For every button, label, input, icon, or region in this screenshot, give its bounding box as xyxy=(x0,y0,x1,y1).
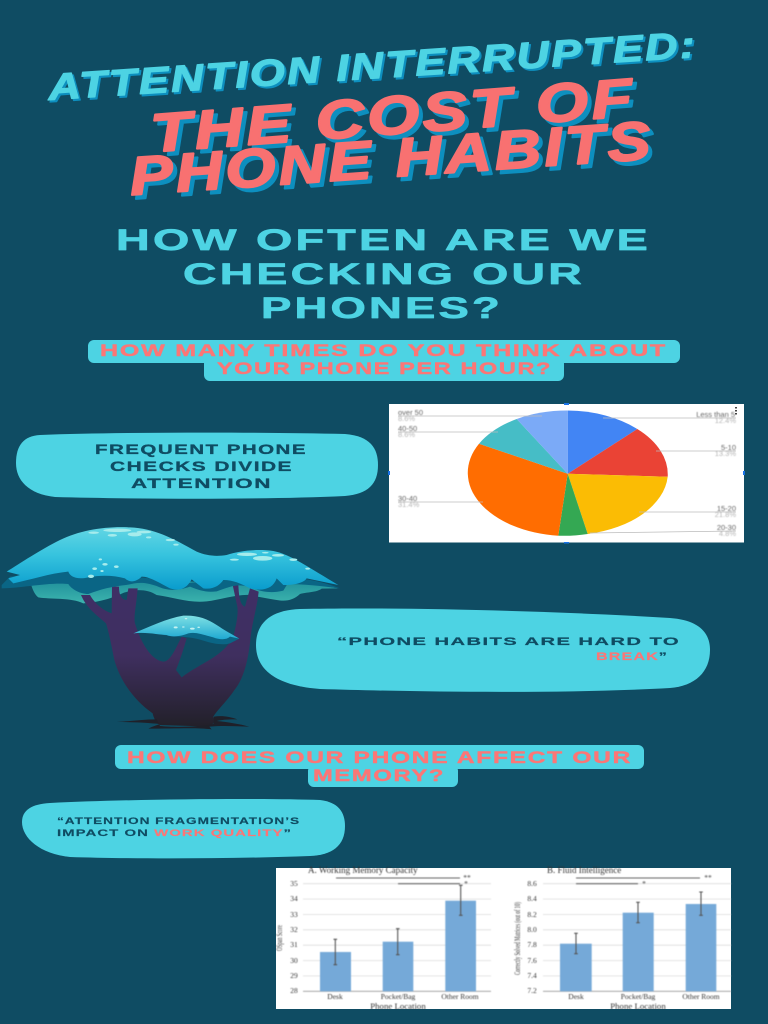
icon: mushroom tree illustration xyxy=(2,527,340,729)
chart B: fluid intelligence: 7.8 xyxy=(527,940,537,949)
chart B: fluid intelligence: Pocket/Bag xyxy=(621,992,656,1001)
chart A: working memory capacity: * xyxy=(464,879,468,888)
pie labels: 5-10 xyxy=(721,443,736,452)
chart A: working memory capacity: Phone Location xyxy=(370,1001,426,1011)
pie labels: 4.8% xyxy=(719,529,736,538)
quote bubble: phone habits are hard to break xyxy=(256,608,710,692)
chart B: fluid intelligence: * xyxy=(642,879,646,888)
pie slices xyxy=(468,410,668,536)
chart B: fluid intelligence: 7.6 xyxy=(527,956,537,965)
pie labels: 12.4% xyxy=(715,416,736,425)
pill heading: how many times: HOW MANY TIMES DO YOU THINK ABOUT xyxy=(100,342,667,360)
pie labels: Less than 5 xyxy=(696,410,735,419)
pill heading: how does our phone affect memory: HOW DOES OUR PHONE AFFECT OUR xyxy=(127,749,632,767)
tree trunk xyxy=(81,585,259,727)
chart B: fluid intelligence: Phone Location xyxy=(610,1001,666,1011)
chart A: working memory capacity: 34 xyxy=(290,894,298,903)
pie labels: 31.4% xyxy=(398,500,420,509)
chart B: fluid intelligence: 7.4 xyxy=(527,971,537,980)
pie labels: 30-40 xyxy=(398,494,417,503)
chart B: fluid intelligence xyxy=(512,865,731,1011)
chart B: fluid intelligence: 8.4 xyxy=(527,894,537,903)
heading: how often are we checking our phones: CHECKING OUR xyxy=(183,258,585,291)
callout: frequent phone checks: CHECKS DIVIDE xyxy=(110,458,293,474)
small cap spots xyxy=(174,618,200,630)
quote bubble: attention fragmentation: “ATTENTION FRAGMENTATION’S xyxy=(57,816,300,827)
pill heading: how does our phone affect memory xyxy=(115,745,644,787)
pie labels xyxy=(398,408,736,538)
chart B: fluid intelligence: 7.2 xyxy=(527,986,537,995)
quote bubble: phone habits are hard to break: BREAK ” xyxy=(596,651,668,663)
chart A: working memory capacity: OSpan Score xyxy=(275,925,284,951)
small mushroom cap xyxy=(133,616,239,639)
pie labels: 20-30 xyxy=(717,523,736,532)
chart A: working memory capacity: 33 xyxy=(290,910,298,919)
title line: attention interrupted: ATTENTION INTERRUPTED: xyxy=(46,24,698,108)
chart B: fluid intelligence: Desk xyxy=(568,992,584,1001)
title line: the cost of: THE COST OF xyxy=(148,68,638,164)
quote bubble: attention fragmentation xyxy=(22,799,345,858)
pie labels: 15-20 xyxy=(717,504,736,513)
tree main cap xyxy=(7,527,338,590)
chart A: working memory capacity: 35 xyxy=(290,879,298,888)
chart A: working memory capacity: Desk xyxy=(327,992,343,1001)
tree shadow cap xyxy=(2,572,340,594)
chart A: working memory capacity: 32 xyxy=(290,925,298,934)
chart B: fluid intelligence: Other Room xyxy=(682,992,720,1001)
chart A: working memory capacity: Other Room xyxy=(441,992,479,1001)
chart A: working memory capacity: 28 xyxy=(290,986,298,995)
chart menu dots xyxy=(735,407,737,414)
pill heading: how many times xyxy=(88,340,680,381)
heading: how often are we checking our phones: HOW OFTEN ARE WE xyxy=(116,224,651,257)
chart B: fluid intelligence: Correctly Solved Matrices (out of 10) xyxy=(512,902,522,975)
chart B: fluid intelligence: B. Fluid Intelligence xyxy=(547,865,621,875)
small cap shadow xyxy=(147,630,239,644)
pie chart panel xyxy=(388,403,745,544)
pie labels: 21.8% xyxy=(715,510,736,519)
pie labels: over 50 xyxy=(398,408,423,417)
pie leader lines xyxy=(398,416,736,533)
chart A: working memory capacity: 29 xyxy=(290,971,298,980)
chart A: working memory capacity: A. Working Memory Capacity xyxy=(308,865,418,875)
tree roots xyxy=(117,716,249,729)
chart A: working memory capacity: Pocket/Bag xyxy=(381,992,416,1001)
bar charts panel xyxy=(275,865,731,1011)
pie labels: 13.3% xyxy=(715,449,736,458)
heading: how often are we checking our phones: PHONES? xyxy=(261,292,503,325)
title line: phone habits: PHONE HABITS xyxy=(128,110,656,207)
pill heading: how does our phone affect memory: MEMORY? xyxy=(313,767,445,785)
chart B: fluid intelligence: ** xyxy=(704,873,712,882)
pie labels: 8.6% xyxy=(398,414,415,423)
chart B: fluid intelligence: 8.0 xyxy=(527,925,537,934)
tree green under-cap xyxy=(31,580,338,603)
pie labels: 8.6% xyxy=(398,430,415,439)
pie labels: 40-50 xyxy=(398,424,417,433)
chart B: fluid intelligence: 8.6 xyxy=(527,879,537,888)
chart A: working memory capacity: 30 xyxy=(290,956,298,965)
pill heading: how many times: YOUR PHONE PER HOUR? xyxy=(217,360,552,378)
callout: frequent phone checks xyxy=(16,433,378,499)
tree cap spots xyxy=(88,529,310,578)
heading: how often are we checking our phones xyxy=(116,224,651,325)
chart A: working memory capacity xyxy=(275,865,491,1011)
chart B: fluid intelligence: 8.2 xyxy=(527,910,537,919)
chart A: working memory capacity: 31 xyxy=(290,940,298,949)
callout: frequent phone checks: ATTENTION xyxy=(131,475,272,491)
title xyxy=(46,24,698,207)
quote bubble: phone habits are hard to break: “PHONE HABITS ARE HARD TO xyxy=(337,636,680,648)
quote bubble: attention fragmentation: IMPACT ON WORK QUALITY ” xyxy=(57,828,292,839)
chart selection handles xyxy=(388,403,745,544)
chart A: working memory capacity: ** xyxy=(463,873,471,882)
callout: frequent phone checks: FREQUENT PHONE xyxy=(95,441,307,457)
